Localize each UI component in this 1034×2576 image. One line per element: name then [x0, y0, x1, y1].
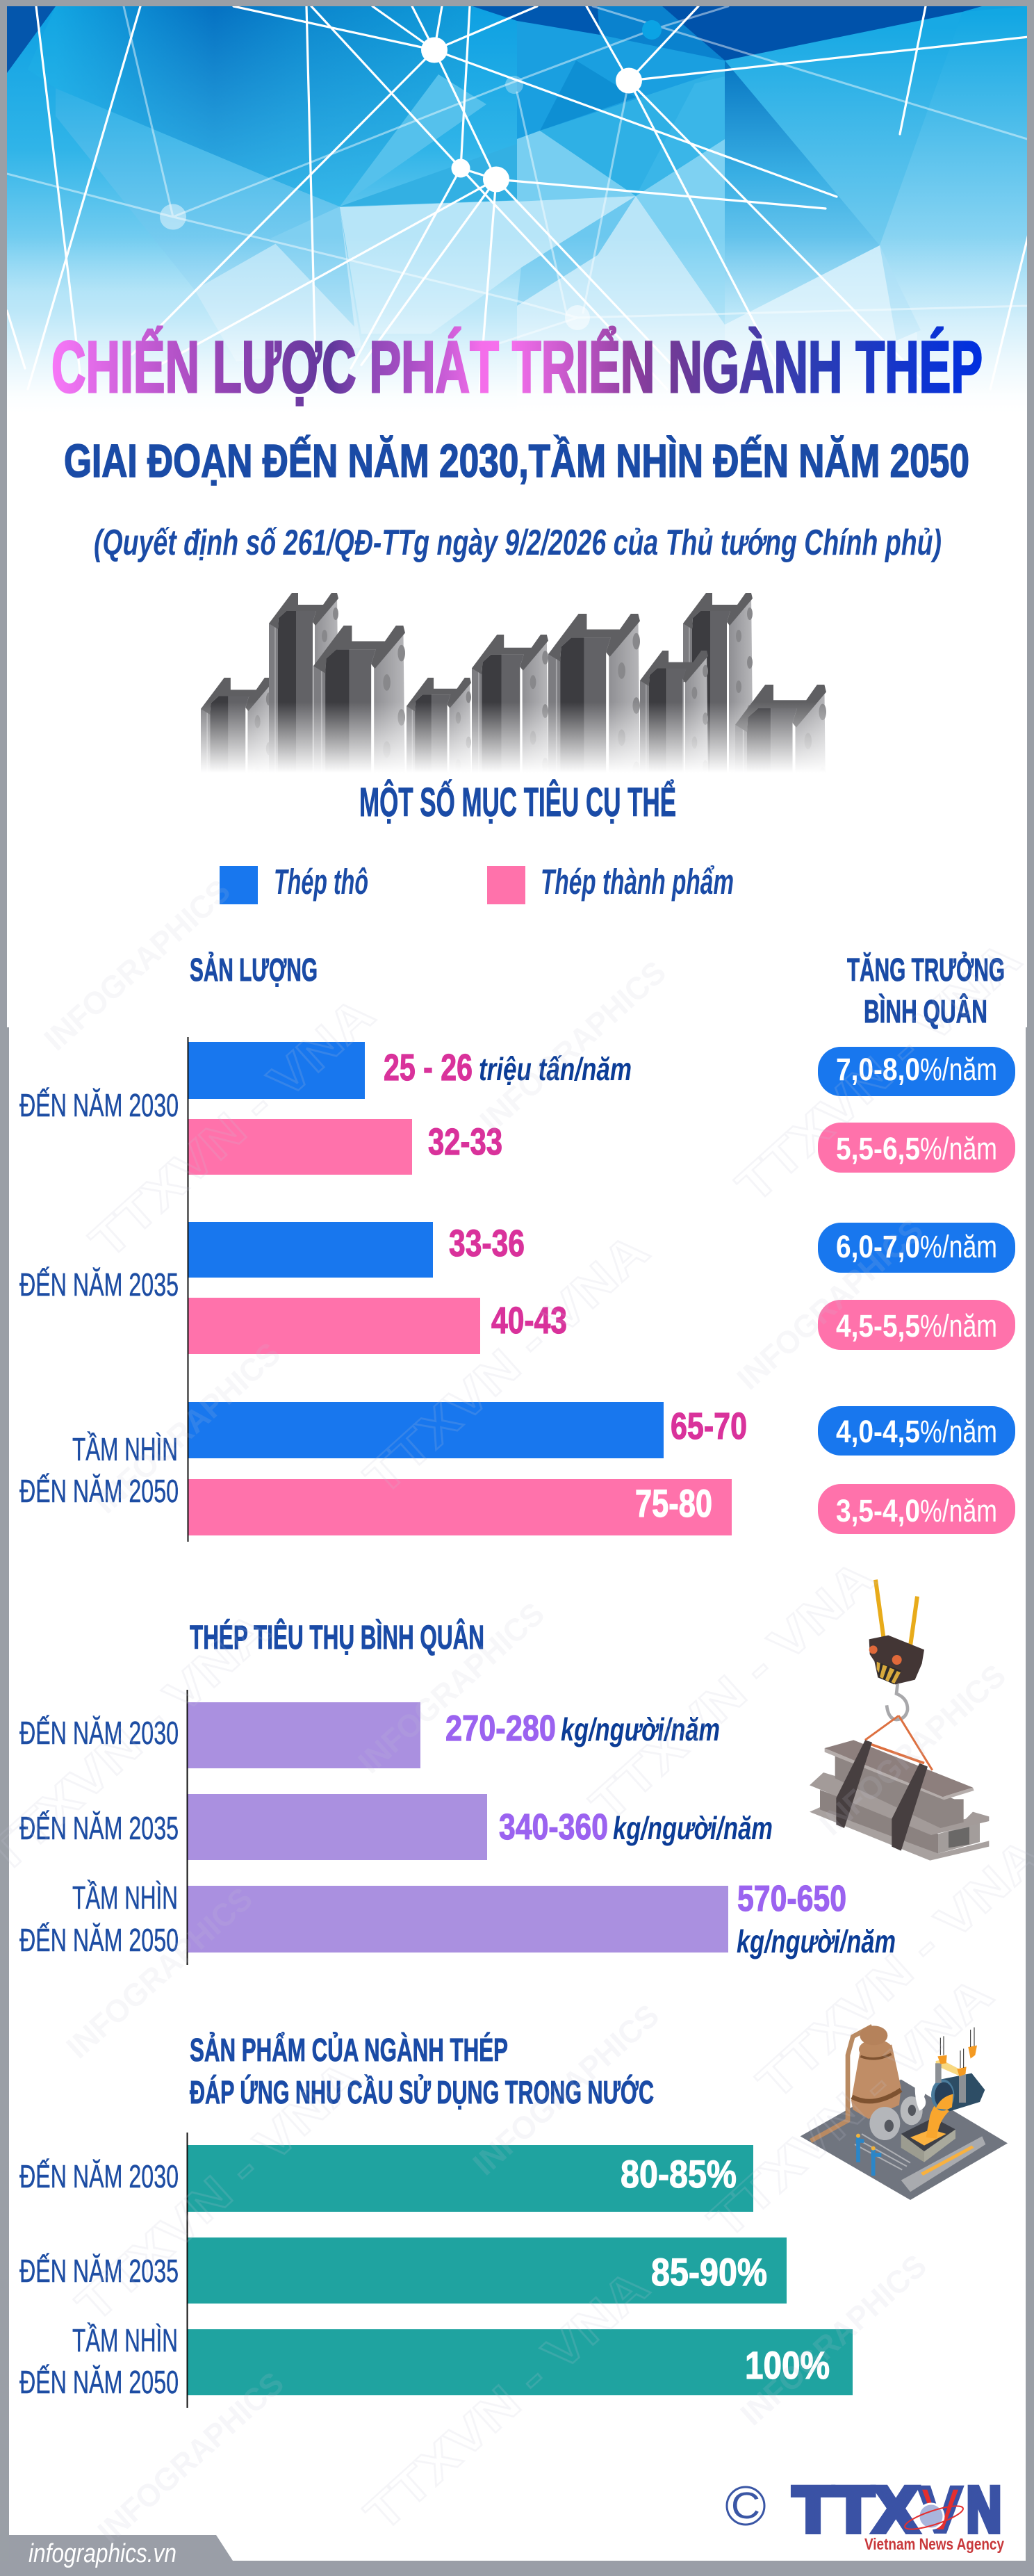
- heading: average growth: [847, 952, 1005, 1029]
- legend: [220, 862, 734, 904]
- output values: 25 - 26: [384, 1047, 473, 1089]
- logo: TTXVN Vietnam News Agency: N: [967, 2475, 1001, 2545]
- legend swatch: finished steel: [487, 866, 525, 904]
- panel: average steel consumption: [19, 1580, 989, 1965]
- legend swatch: crude steel: [220, 866, 258, 904]
- watermarks: INFOGRAPHICS: [91, 2365, 290, 2550]
- growth pills: %/năm: [920, 1229, 997, 1264]
- watermarks: INFOGRAPHICS: [352, 1595, 551, 1780]
- watermarks: INFOGRAPHICS: [466, 1997, 666, 2182]
- watermarks: INFOGRAPHICS: [60, 1880, 259, 2065]
- footer source tab: [9, 2535, 233, 2561]
- bars: consumption: [186, 1690, 728, 1965]
- legend label: finished steel: Thép thành phẩm: [541, 862, 734, 902]
- domestic demand values: 80-85%: [621, 2152, 737, 2196]
- output values: 75-80: [635, 1481, 712, 1525]
- watermarks: TTXVN - VNA: [66, 2050, 370, 2332]
- growth pills: 4,5-5,5: [836, 1308, 920, 1344]
- watermarks: INFOGRAPHICS: [38, 872, 237, 1057]
- period labels: ĐẾN NĂM 2030: [19, 1087, 179, 1123]
- output values: triệu tấn/năm: [479, 1051, 632, 1087]
- icon: steel plant: [801, 2025, 1008, 2200]
- bars: output: [188, 1037, 732, 1542]
- hero background: blue polygon network: [7, 6, 1028, 423]
- watermarks: TTXVN - VNA: [747, 1827, 1034, 2110]
- growth pills: 6,0-7,0: [836, 1229, 920, 1264]
- heading: average consumption: THÉP TIÊU THỤ BÌNH QUÂN: [190, 1618, 484, 1656]
- growth pills: %/năm: [920, 1052, 997, 1087]
- period labels: TẦM NHÌN: [72, 1431, 178, 1467]
- period labels: [19, 1087, 179, 1509]
- watermarks: TTXVN - VNA: [726, 931, 1031, 1213]
- domestic demand values: [621, 2152, 830, 2387]
- heading: products meeting domestic demand: ĐÁP ỨNG NHU CẦU SỬ DỤNG TRONG NƯỚC: [190, 2074, 654, 2110]
- logo: TTXVN Vietnam News Agency: Vietnam News Agency: [864, 2535, 1004, 2553]
- domestic demand values: 85-90%: [651, 2250, 767, 2294]
- growth pills: [818, 1047, 1015, 1534]
- bottom frame band: [0, 2561, 1034, 2576]
- watermarks: TTXVN - VNA: [354, 1223, 659, 1505]
- consumption values: kg/người/năm: [737, 1923, 896, 1959]
- heading: output: SẢN LƯỢNG: [190, 952, 318, 988]
- period labels: TẦM NHÌN: [72, 2322, 178, 2358]
- panel: domestic demand met: [19, 2025, 1008, 2408]
- heading: products meeting domestic demand: SẢN PHẨM CỦA NGÀNH THÉP: [190, 2032, 508, 2068]
- period labels: ĐẾN NĂM 2030: [19, 1715, 179, 1751]
- logo: TTXVN Vietnam News Agency: TTX: [793, 2475, 918, 2545]
- growth pills: 3,5-4,0: [836, 1493, 920, 1529]
- consumption values: 270-280: [445, 1709, 556, 1749]
- consumption values: kg/người/năm: [613, 1810, 773, 1846]
- bars: domestic demand: [186, 2133, 853, 2408]
- logo: TTXVN Vietnam News Agency: V: [919, 2475, 962, 2545]
- heading: products meeting domestic demand: [190, 2032, 654, 2110]
- faint network lines: [7, 6, 1027, 348]
- output values: 33-36: [449, 1223, 525, 1264]
- white network lines: [7, 6, 1028, 389]
- period labels: ĐẾN NĂM 2050: [19, 1473, 179, 1509]
- section heading: specific targets: MỘT SỐ MỤC TIÊU CỤ THỂ: [359, 780, 676, 825]
- panel: output chart: [19, 952, 1015, 1542]
- icon: crane hook lifting steel beams: [810, 1580, 989, 1861]
- watermarks: INFOGRAPHICS: [734, 2247, 933, 2432]
- watermarks: TTXVN - VNA: [698, 1966, 1003, 2249]
- watermarks: INFOGRAPHICS: [473, 954, 673, 1139]
- logo: TTXVN Vietnam News Agency: [793, 2475, 1004, 2553]
- growth pills: %/năm: [920, 1414, 997, 1449]
- legend label: crude steel: Thép thô: [274, 862, 368, 902]
- illustration: steel beams: [201, 593, 826, 770]
- consumption values: 340-360: [499, 1807, 608, 1848]
- output values: 65-70: [671, 1405, 747, 1447]
- source website: infographics.vn: [28, 2539, 177, 2568]
- period labels: ĐẾN NĂM 2050: [19, 2364, 179, 2400]
- growth pills: 5,5-6,5: [836, 1131, 920, 1166]
- copyright mark: C: [731, 2485, 760, 2527]
- growth pills: %/năm: [920, 1308, 997, 1344]
- output values: 32-33: [428, 1121, 502, 1163]
- period labels: ĐẾN NĂM 2050: [19, 1922, 179, 1958]
- growth pills: 7,0-8,0: [836, 1052, 920, 1087]
- consumption values: 570-650: [737, 1879, 846, 1919]
- period labels: ĐẾN NĂM 2035: [19, 1810, 179, 1846]
- output values: [384, 1047, 747, 1525]
- period labels: [19, 1715, 179, 1958]
- domestic demand values: 100%: [745, 2343, 830, 2387]
- consumption values: [445, 1709, 896, 1959]
- watermarks: INFOGRAPHICS: [813, 1657, 1012, 1842]
- watermarks: TTXVN - VNA: [580, 1549, 885, 1832]
- period labels: ĐẾN NĂM 2030: [19, 2158, 179, 2194]
- growth pills: %/năm: [920, 1493, 997, 1529]
- watermarks: TTXVN - VNA: [80, 986, 384, 1269]
- network nodes: [160, 20, 662, 330]
- period labels: ĐẾN NĂM 2035: [19, 2253, 179, 2289]
- consumption values: kg/người/năm: [561, 1711, 720, 1747]
- watermarks: TTXVN - VNA: [354, 2259, 659, 2541]
- period labels: TẦM NHÌN: [72, 1880, 178, 1916]
- watermarks: [0, 872, 1034, 2550]
- watermarks: INFOGRAPHICS: [730, 1212, 930, 1396]
- period labels: ĐẾN NĂM 2035: [19, 1266, 179, 1303]
- growth pills: 4,0-4,5: [836, 1414, 920, 1449]
- growth pills: %/năm: [920, 1131, 997, 1166]
- watermarks: INFOGRAPHICS: [88, 1335, 287, 1520]
- period labels: [19, 2158, 179, 2400]
- output values: 40-43: [491, 1300, 567, 1342]
